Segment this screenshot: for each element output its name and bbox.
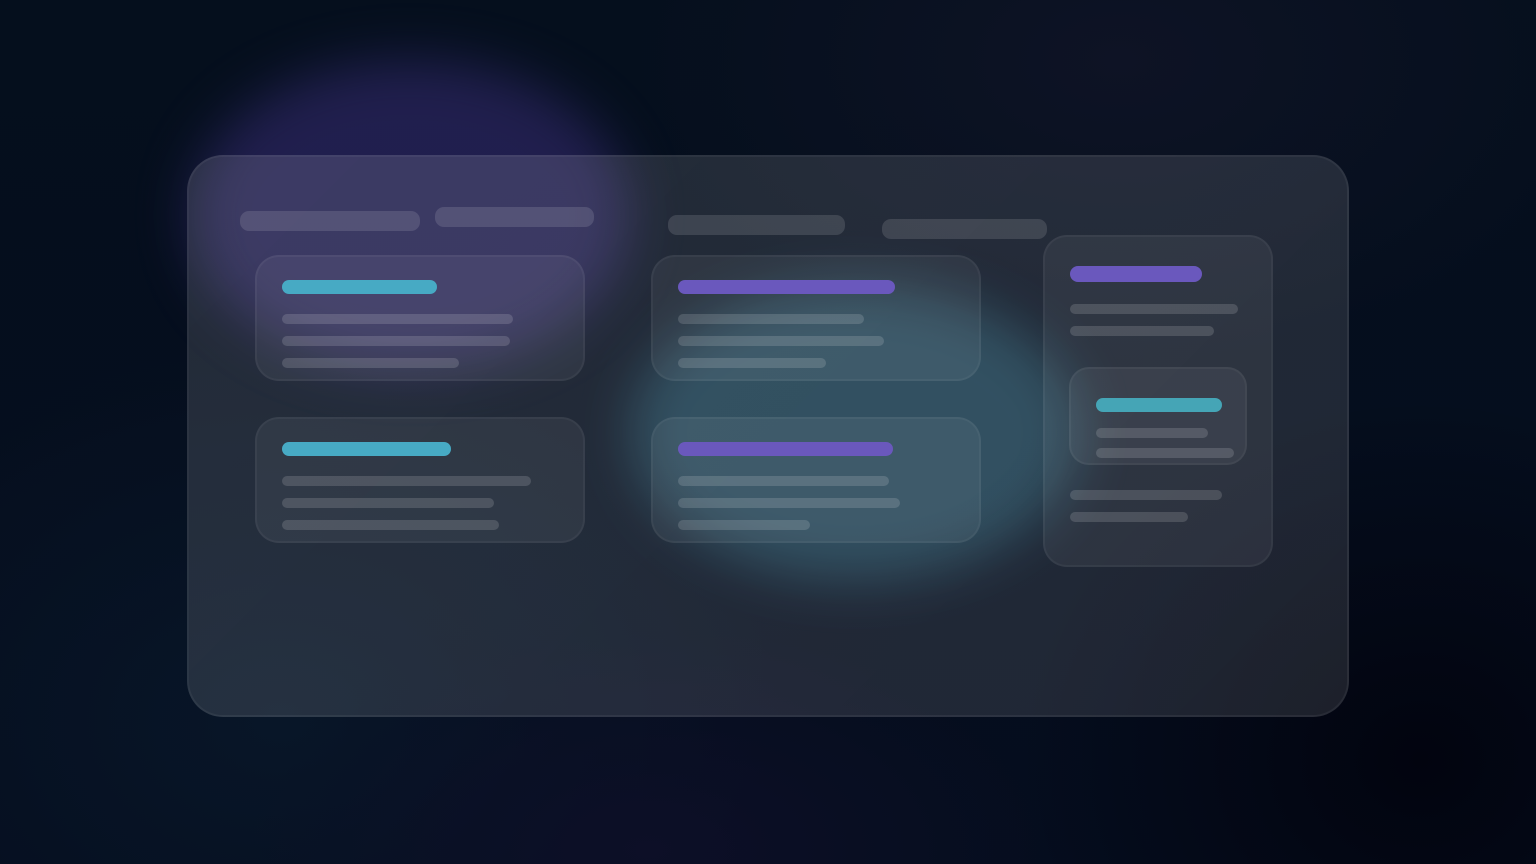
card: right column <box>1043 235 1273 567</box>
card: top middle <box>651 255 981 381</box>
glow: purple <box>190 60 630 370</box>
card: bottom middle <box>651 417 981 543</box>
main glass panel <box>187 155 1349 717</box>
card: bottom left <box>255 417 585 543</box>
header pills <box>240 207 1047 239</box>
glow: teal <box>630 285 1080 580</box>
nested card <box>1069 367 1247 465</box>
card: top left <box>255 255 585 381</box>
